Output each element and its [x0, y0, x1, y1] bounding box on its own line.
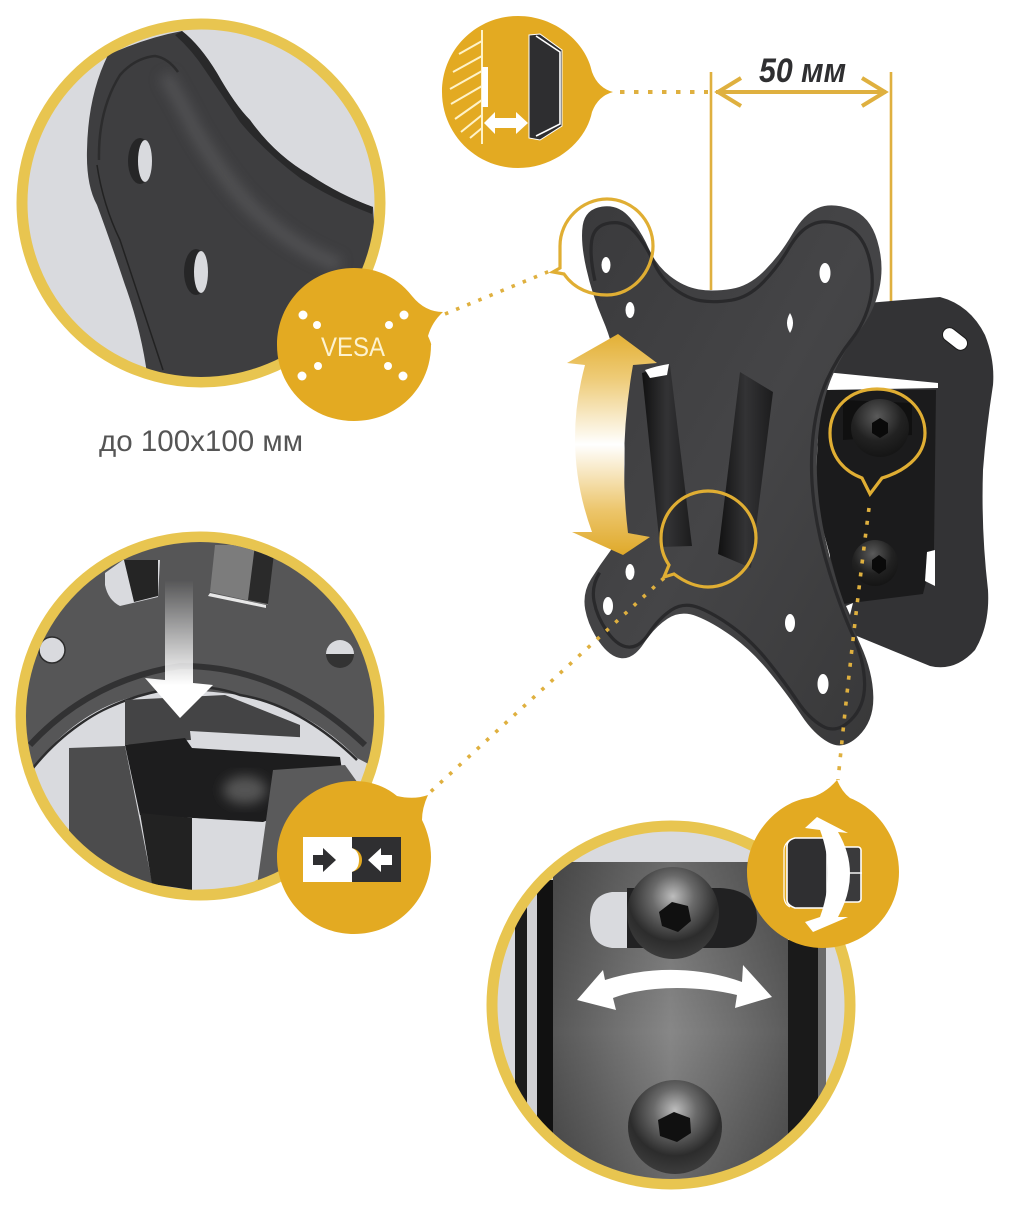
dotted leader: lock callout	[427, 578, 664, 795]
bracket right block	[258, 765, 356, 880]
icon: VESA bubble: VESA	[321, 332, 385, 362]
holes in detail	[128, 138, 145, 184]
callout ring: plate corner	[553, 199, 653, 295]
central plate	[553, 862, 788, 1202]
bottom screw	[628, 1080, 722, 1174]
holes in detail	[39, 637, 65, 663]
right slot	[718, 372, 773, 568]
panel: lock detail circle	[10, 530, 380, 900]
wall plate of the bracket	[825, 297, 993, 667]
top screw	[627, 867, 719, 959]
plate corner in detail	[87, 31, 385, 400]
left slot	[642, 365, 692, 547]
side rails	[515, 908, 527, 1102]
arrow: tilt range	[567, 334, 657, 555]
wall plate mounting slot	[940, 325, 970, 353]
icon: VESA bubble	[277, 268, 443, 421]
dimension lines: 50 mm	[711, 72, 891, 310]
mounting holes	[602, 257, 610, 273]
panel: VESA detail circle	[22, 24, 385, 400]
bracket center	[125, 738, 345, 822]
arrow: downward	[145, 580, 213, 718]
icon: wall distance bubble	[442, 16, 613, 168]
bracket left block	[69, 746, 152, 895]
center below ridge	[125, 695, 300, 745]
dimension label: 50 mm: 50 мм	[759, 52, 846, 90]
icon: lock bubble	[277, 781, 431, 934]
slots in detail	[105, 560, 160, 606]
text: VESA size: до 100х100 мм	[99, 425, 303, 458]
callout ring: slot	[661, 491, 756, 587]
pivot block with screws	[815, 390, 936, 615]
panel: swivel detail circle	[492, 826, 850, 1202]
arrow: swivel	[577, 965, 772, 1010]
icon: swivel bubble	[747, 780, 899, 948]
grey gaps	[190, 731, 300, 745]
dotted leader: swivel callout	[838, 508, 869, 780]
upper plate	[26, 542, 374, 767]
adjustment slot	[590, 892, 627, 948]
dotted leader: depth icon to dimension	[620, 90, 708, 94]
window in wall plate	[825, 372, 938, 390]
mounting plate	[582, 205, 882, 745]
dotted leader: VESA callout	[445, 271, 550, 314]
plate ridge	[30, 666, 365, 745]
callout ring: screw	[830, 389, 925, 494]
